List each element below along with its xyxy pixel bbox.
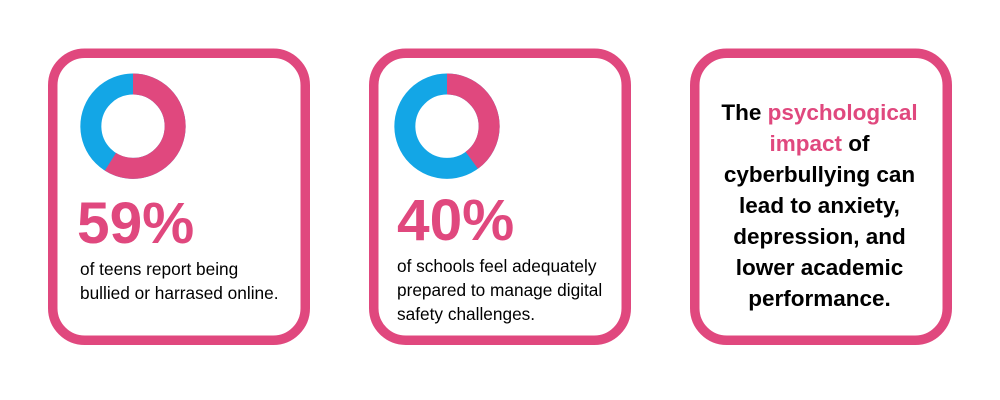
text: teens description (80, 259, 279, 303)
donut chart: 59% (80, 74, 186, 179)
text: psychological impact statement: performance. (748, 286, 891, 311)
text: psychological impact statement: depression, and (733, 224, 906, 249)
text: psychological impact statement (721, 100, 918, 311)
text: schools description: safety challenges. (397, 304, 535, 324)
text: schools description: prepared to manage digital (397, 280, 602, 300)
text: teens description: bullied or harrased online. (80, 283, 279, 303)
donut chart: 40% (394, 74, 500, 179)
panel: teens bullied (48, 48, 310, 345)
text: psychological impact statement: cyberbullying can (724, 162, 915, 187)
text: psychological impact statement: lower academic (736, 255, 903, 280)
panel: psychological impact (690, 48, 952, 345)
text: schools description (397, 256, 602, 324)
text: psychological impact statement: The psychological (721, 100, 918, 125)
statistic: 40%: 40% (397, 188, 514, 253)
statistic: 59%: 59% (77, 191, 194, 256)
text: teens description: of teens report being (80, 259, 238, 279)
panel: schools prepared (369, 48, 631, 345)
text: psychological impact statement: impact of (769, 131, 870, 156)
text: psychological impact statement: lead to anxiety, (739, 193, 900, 218)
text: schools description: of schools feel adequately (397, 256, 596, 276)
